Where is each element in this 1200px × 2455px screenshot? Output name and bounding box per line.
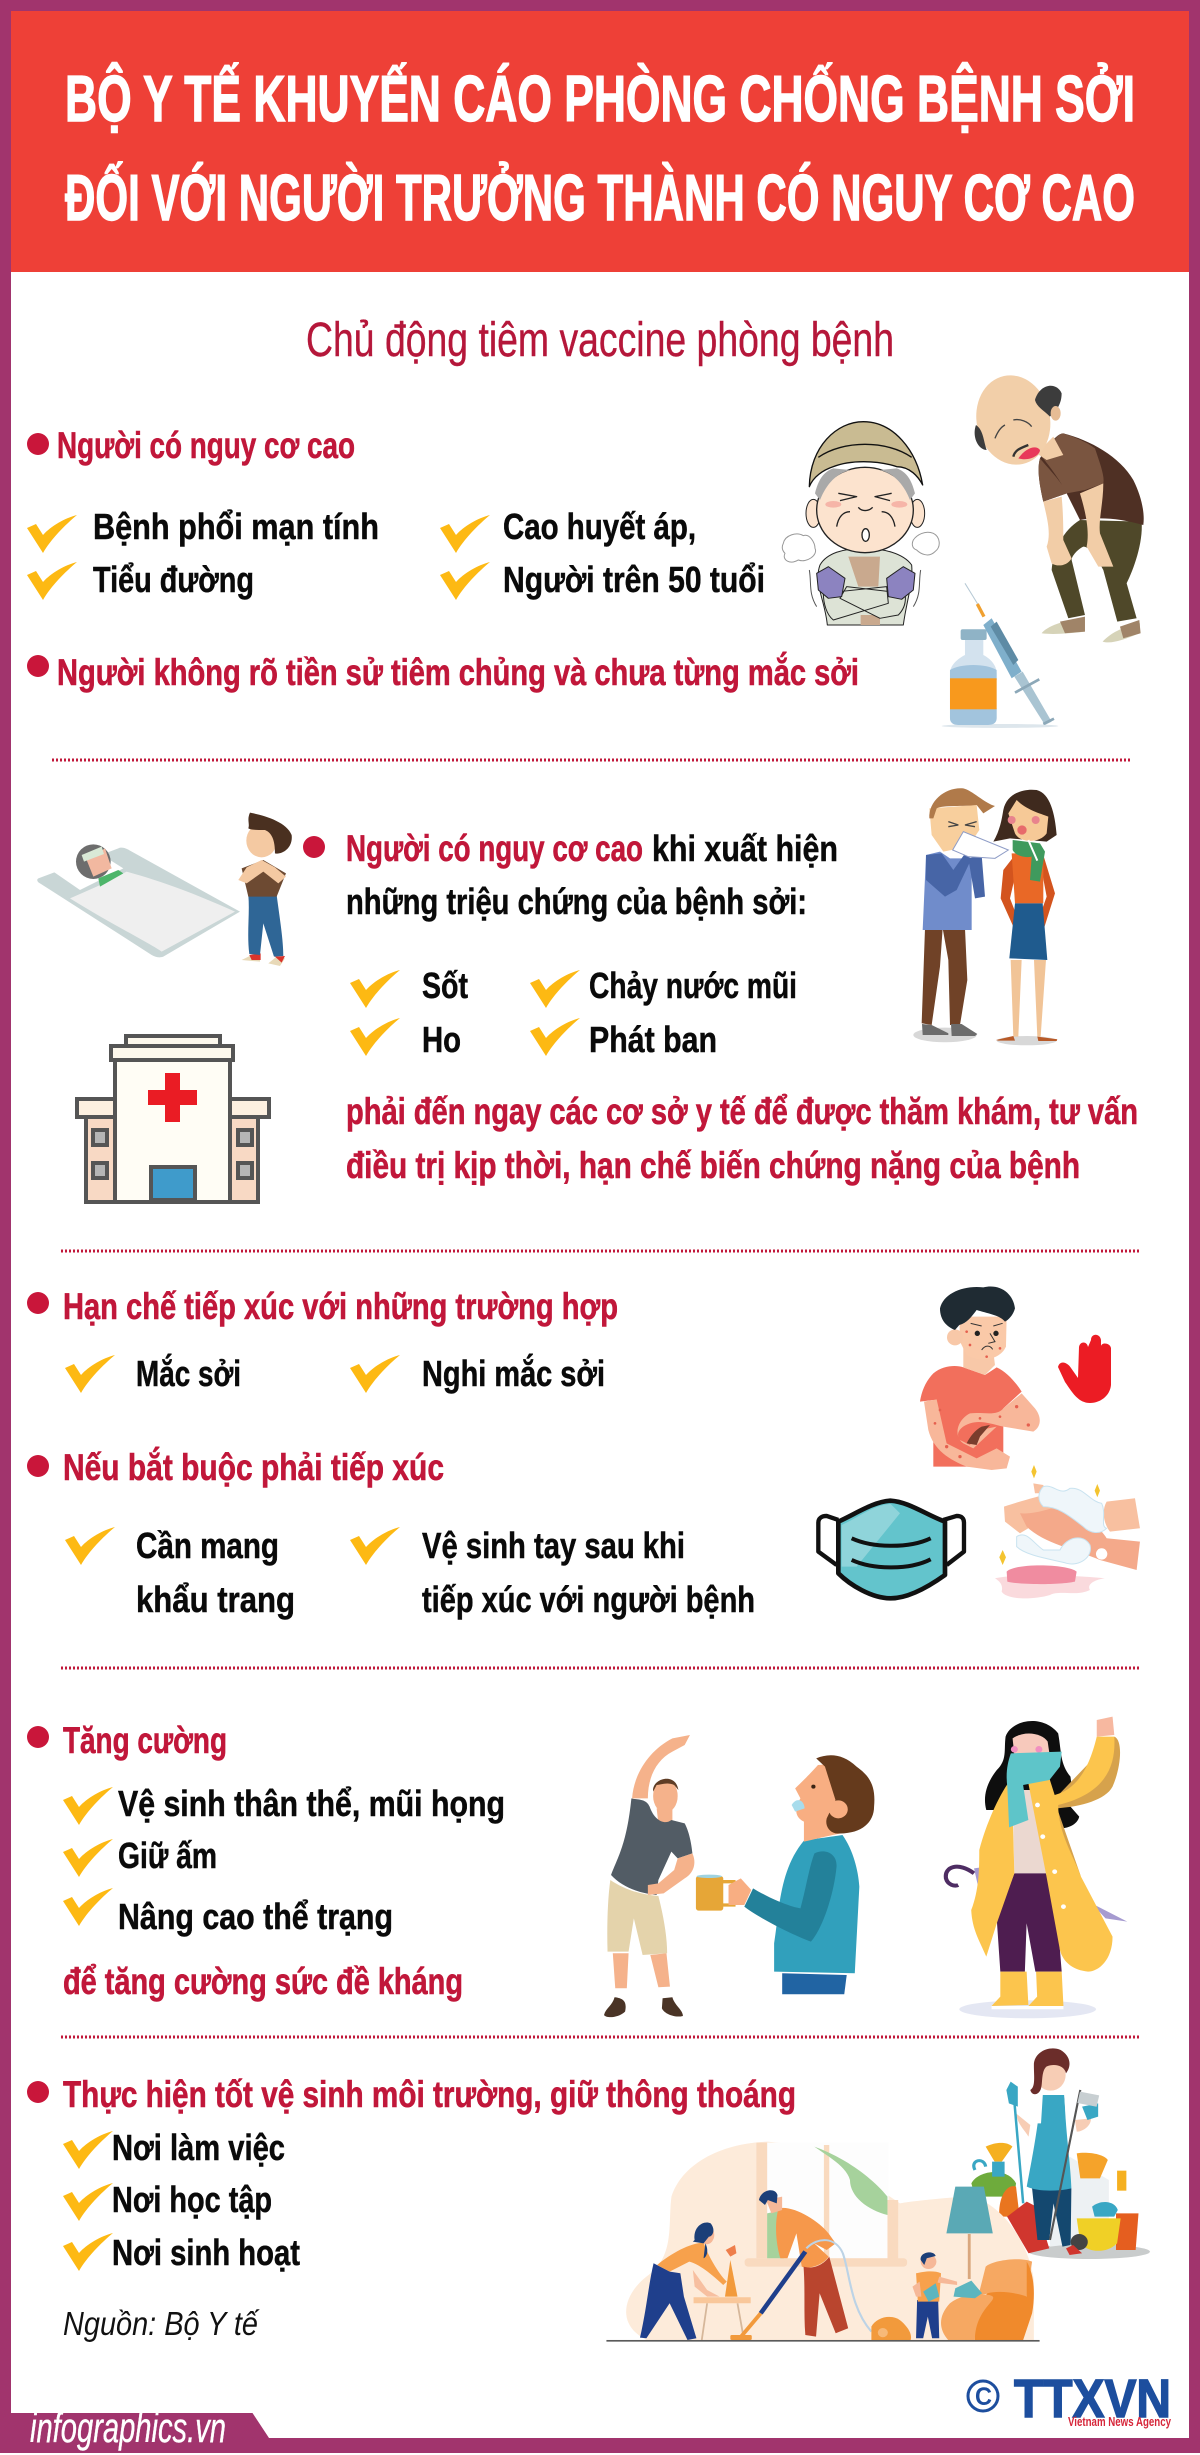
text: people at risk showing symptoms <box>303 828 838 922</box>
icon: family cleaning house <box>606 2142 1040 2342</box>
check item: suspected <box>350 1352 605 1394</box>
heading: strengthen <box>27 1720 227 1761</box>
check item: wash hands <box>350 1525 755 1620</box>
icon: man gargling with cup <box>696 1755 874 1994</box>
check item: improve fitness <box>63 1888 393 1937</box>
panel: vaccination <box>27 368 1144 728</box>
check item: runny nose: Chảy nước mũi <box>589 965 797 1006</box>
check item: cough <box>350 1018 461 1060</box>
check item: fever <box>350 965 468 1008</box>
check item: chronic lung disease: Bệnh phổi mạn tính <box>93 506 379 547</box>
check item: suspected: Nghi mắc sởi <box>422 1352 605 1394</box>
check item: wash hands: Vệ sinh tay sau khi <box>422 1525 685 1566</box>
check item: living place <box>63 2232 300 2273</box>
icon: cold elderly person <box>782 422 939 625</box>
icon: sick elderly man <box>968 368 1144 642</box>
heading: high risk group: Người có nguy cơ cao <box>57 425 355 466</box>
check item: rash <box>530 1018 717 1060</box>
check item: diabetes <box>27 559 254 600</box>
icon: hospital <box>77 1036 269 1202</box>
icon: face mask <box>818 1501 964 1598</box>
footer: site label: infographics.vn <box>30 2404 226 2451</box>
check item: wear a mask <box>65 1525 295 1620</box>
panel: symptoms <box>37 788 1138 1202</box>
panel: environmental hygiene <box>27 2048 1172 2451</box>
check item: infected <box>65 1352 241 1394</box>
logo: TTXVN copyright: TTXVN <box>1014 2369 1171 2429</box>
icon: man stretching <box>604 1735 694 2017</box>
heading: high risk group <box>27 425 355 466</box>
panel: strengthen resistance <box>27 1717 1127 2018</box>
text: go to a medical facility <box>346 1091 1138 1186</box>
text: people at risk showing symptoms: những triệu chứng của bệnh sởi: <box>346 881 807 922</box>
icon: vaccine vial and syringe <box>942 583 1058 728</box>
check item: over 50 years old <box>440 559 765 600</box>
text: people at risk showing symptoms: khi xuất hiện <box>652 828 838 869</box>
subtitle: Chủ động tiêm vaccine phòng bệnh <box>306 314 894 367</box>
heading: environmental hygiene: Thực hiện tốt vệ sinh môi trường, giữ thông thoáng <box>63 2074 796 2115</box>
check item: diabetes: Tiểu đường <box>93 559 254 600</box>
icon: hand washing with soap <box>995 1465 1140 1598</box>
check item: infected: Mắc sởi <box>136 1352 241 1394</box>
heading: strengthen: Tăng cường <box>63 1720 227 1761</box>
heading: unknown vaccination history: Người không rõ tiền sử tiêm chủng và chưa từng mắc sởi <box>57 651 859 693</box>
check item: study place: Nơi học tập <box>112 2179 272 2220</box>
check item: body and throat hygiene: Vệ sinh thân thể, mũi họng <box>118 1783 505 1824</box>
text: to strengthen resistance: để tăng cường sức đề kháng <box>63 1961 463 2002</box>
check item: over 50 years old: Người trên 50 tuổi <box>503 559 765 600</box>
title banner <box>11 11 1189 272</box>
check item: runny nose <box>530 965 797 1008</box>
icon: patient lying in bed <box>37 844 240 957</box>
text: people at risk showing symptoms: Người có nguy cơ cao <box>346 828 643 869</box>
check item: wash hands: tiếp xúc với người bệnh <box>422 1579 755 1620</box>
icon: sneezing man and feverish woman <box>913 788 1057 1045</box>
check item: hypertension: Cao huyết áp, <box>503 506 696 547</box>
check item: chronic lung disease <box>27 506 379 553</box>
check item: fever: Sốt <box>422 965 468 1006</box>
check item: improve fitness: Nâng cao thể trạng <box>118 1896 393 1937</box>
check item: study place <box>63 2179 272 2221</box>
source note: Nguồn: Bộ Y tế <box>63 2305 260 2342</box>
check item: workplace <box>63 2127 285 2169</box>
check item: hypertension <box>440 506 696 553</box>
heading: limit contact: Hạn chế tiếp xúc với những trường hợp <box>63 1286 618 1327</box>
logo: TTXVN copyright: C <box>975 2383 992 2411</box>
check item: cough: Ho <box>422 1019 461 1060</box>
check item: workplace: Nơi làm việc <box>112 2127 285 2168</box>
panel: limit contact <box>27 1286 1140 1620</box>
icon: boy with rash <box>920 1286 1040 1470</box>
heading: if contact is required: Nếu bắt buộc phải tiếp xúc <box>63 1446 444 1488</box>
check item: keep warm <box>63 1835 217 1877</box>
check item: wear a mask: khẩu trang <box>136 1579 295 1620</box>
check item: wear a mask: Cần mang <box>136 1525 279 1566</box>
check item: rash: Phát ban <box>589 1019 717 1060</box>
check item: keep warm: Giữ ấm <box>118 1835 217 1876</box>
icon: red stop hand <box>1058 1335 1111 1403</box>
icon: woman in raincoat and mask <box>946 1717 1127 2018</box>
icon: cleaner with supplies <box>971 2048 1150 2259</box>
check item: living place: Nơi sinh hoạt <box>112 2232 300 2273</box>
icon: boy with sore throat <box>238 813 292 966</box>
